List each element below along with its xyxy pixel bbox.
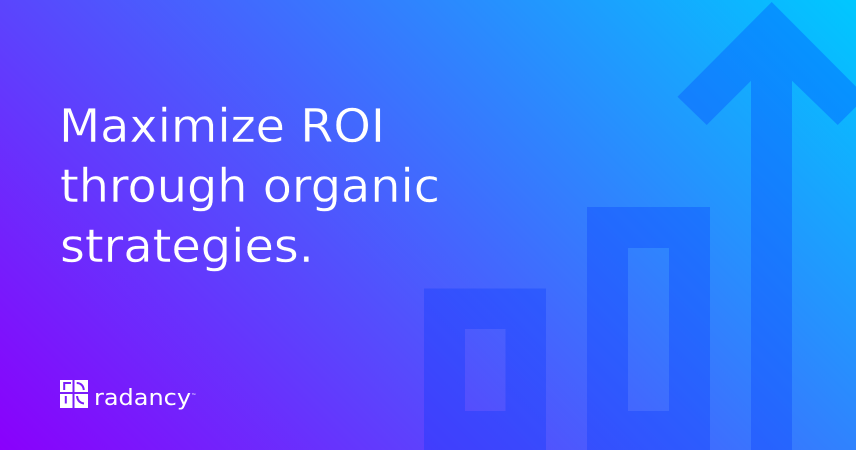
title	[59, 99, 440, 273]
logo wordmark: radancy	[94, 386, 191, 411]
logo icon	[60, 380, 88, 408]
title line 1: Maximize ROI	[59, 99, 385, 153]
title line 2: through organic	[60, 159, 440, 213]
tall bar	[587, 207, 710, 450]
up arrow	[678, 2, 856, 450]
short bar	[424, 288, 546, 450]
radancy logo	[60, 380, 196, 411]
trademark mark: ™	[192, 392, 196, 397]
chart graphic: bars and arrow	[424, 2, 856, 450]
title line 3: strategies.	[60, 219, 314, 273]
